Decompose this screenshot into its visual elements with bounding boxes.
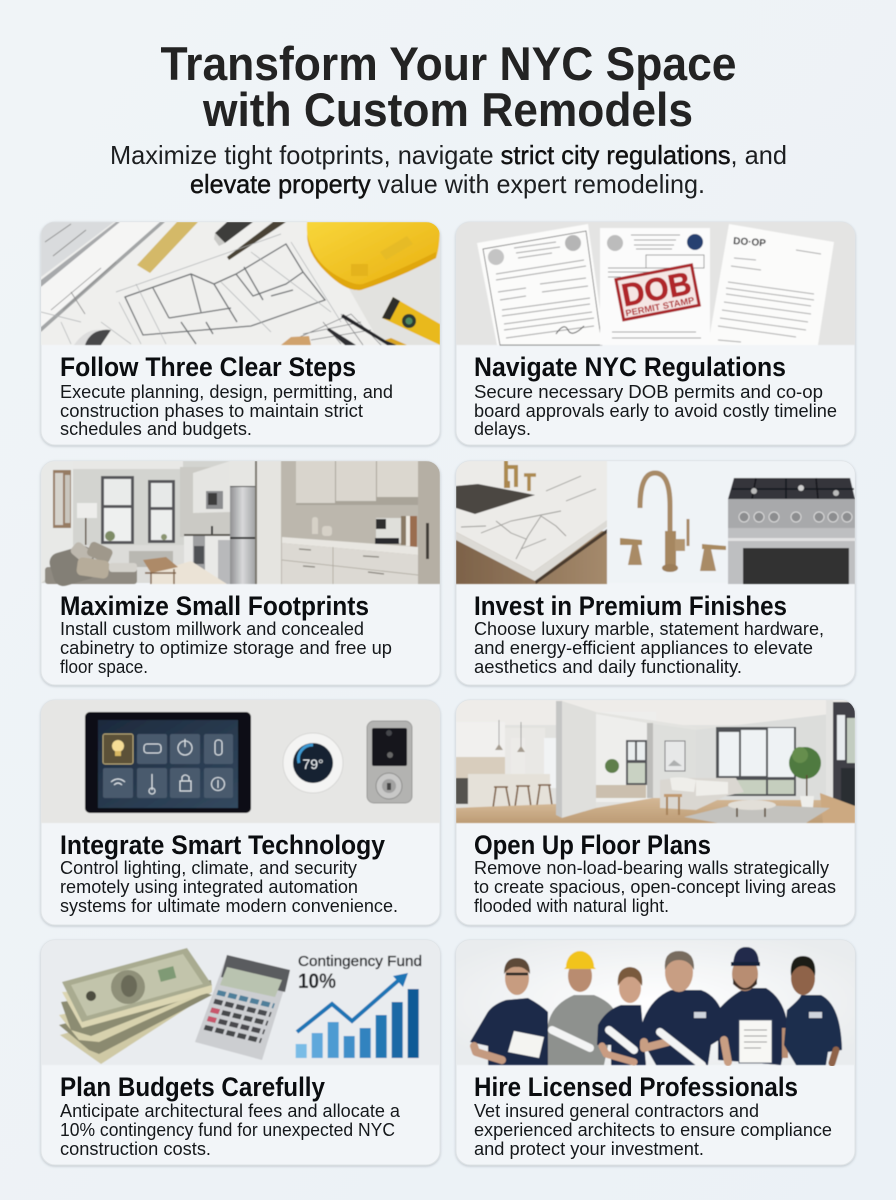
heading: Invest in Premium Finishes xyxy=(474,591,787,621)
subtitle: elevate property value with expert remodeling. xyxy=(190,169,705,199)
image: smart tablet, thermostat and lock xyxy=(41,700,440,823)
text block: Vet insured general contractors and xyxy=(474,1101,759,1121)
text block: aesthetics and daily functionality. xyxy=(474,657,742,677)
image: permit documents with stamp: PERMIT STAMP xyxy=(625,295,695,318)
icon: calculator xyxy=(195,955,290,1060)
text block: Execute planning, design, permitting, and xyxy=(60,382,393,402)
text block xyxy=(60,1101,401,1159)
text block: and energy-efficient appliances to elevate xyxy=(474,638,813,658)
text block: cabinetry to optimize storage and free up xyxy=(60,638,392,658)
text block xyxy=(474,858,836,916)
title: with Custom Remodels xyxy=(202,83,693,136)
icon: tablet xyxy=(85,712,251,813)
panel: navigate nyc regulations xyxy=(456,222,855,445)
image: permit documents with stamp: DO·OP xyxy=(733,236,767,249)
text block: delays. xyxy=(474,419,531,439)
text block: and protect your investment. xyxy=(474,1139,704,1159)
text block: Anticipate architectural fees and allocate a xyxy=(60,1101,401,1121)
image: marble counter, brass faucet and range xyxy=(456,461,855,584)
panel: open up floor plans xyxy=(456,700,855,925)
text block xyxy=(474,619,824,677)
person: grey polo hard hat xyxy=(544,951,615,1065)
text block xyxy=(60,619,392,677)
text block xyxy=(60,382,393,439)
blueprint rolls xyxy=(552,1030,702,1065)
text block: board approvals early to avoid costly timeline xyxy=(474,401,837,421)
subtitle: Maximize tight footprints, navigate strict city regulations, and xyxy=(110,140,787,170)
heading: Integrate Smart Technology xyxy=(60,830,385,860)
text block: experienced architects to ensure compliance xyxy=(474,1120,832,1140)
text block xyxy=(60,858,398,916)
image: team of contractors xyxy=(456,940,855,1065)
text block xyxy=(474,1101,832,1159)
image: permit documents with stamp: DOB xyxy=(619,265,694,313)
text block: systems for ultimate modern convenience. xyxy=(60,896,398,916)
panel: invest in premium finishes xyxy=(456,461,855,685)
icon: thermostat: 79° xyxy=(302,756,324,772)
heading: Maximize Small Footprints xyxy=(60,591,369,621)
panel: maximize small footprints xyxy=(41,461,440,685)
text block: construction phases to maintain strict xyxy=(60,401,363,421)
person: navy polo with glasses xyxy=(470,958,548,1065)
text block: Secure necessary DOB permits and co-op xyxy=(474,382,823,402)
heading: Hire Licensed Professionals xyxy=(474,1072,798,1102)
text block: Control lighting, climate, and security xyxy=(60,858,357,878)
panel: integrate smart technology xyxy=(41,700,440,925)
bar chart: contingency growth xyxy=(296,973,419,1058)
text block: Install custom millwork and concealed xyxy=(60,619,364,639)
person: woman with blueprint xyxy=(597,967,646,1065)
icon: stack of cash xyxy=(59,948,212,1064)
heading: Open Up Floor Plans xyxy=(474,830,711,860)
subtitle xyxy=(110,140,787,199)
person: center navy polo with blueprint xyxy=(639,951,728,1065)
text block: Choose luxury marble, statement hardware, xyxy=(474,619,824,639)
text block: construction costs. xyxy=(60,1139,211,1159)
text block: 10% contingency fund for unexpected NYC xyxy=(60,1120,395,1140)
image: blueprints, hard hat and tools xyxy=(41,222,440,345)
text block: remotely using integrated automation xyxy=(60,877,358,897)
icon: smart lock xyxy=(367,721,412,803)
panel: hire licensed professionals xyxy=(456,940,855,1165)
heading: Plan Budgets Carefully xyxy=(60,1072,325,1102)
title: Transform Your NYC Space xyxy=(160,37,736,90)
text block: to create spacious, open-concept living areas xyxy=(474,877,836,897)
text block xyxy=(474,382,837,439)
image: open concept living area xyxy=(456,700,855,823)
panel: follow three clear steps xyxy=(41,222,440,445)
title xyxy=(160,37,736,136)
text block: flooded with natural light. xyxy=(474,896,669,916)
heading: Follow Three Clear Steps xyxy=(60,352,356,382)
text block: schedules and budgets. xyxy=(60,419,252,439)
text block: Remove non-load-bearing walls strategically xyxy=(474,858,829,878)
person: navy polo right xyxy=(718,947,788,1065)
panel: plan budgets carefully xyxy=(41,940,440,1165)
icon: thermostat xyxy=(283,733,343,793)
label: contingency fund: Contingency Fund xyxy=(298,953,422,970)
person: navy polo far right xyxy=(784,956,842,1065)
image: compact apartment kitchen and living room xyxy=(41,461,440,588)
number: 10 percent: 10% xyxy=(298,970,336,993)
image: cash, calculator and contingency chart xyxy=(41,940,440,1065)
text block: floor space. xyxy=(60,657,148,677)
image: permit documents with stamp xyxy=(456,222,855,345)
heading: Navigate NYC Regulations xyxy=(474,352,786,382)
